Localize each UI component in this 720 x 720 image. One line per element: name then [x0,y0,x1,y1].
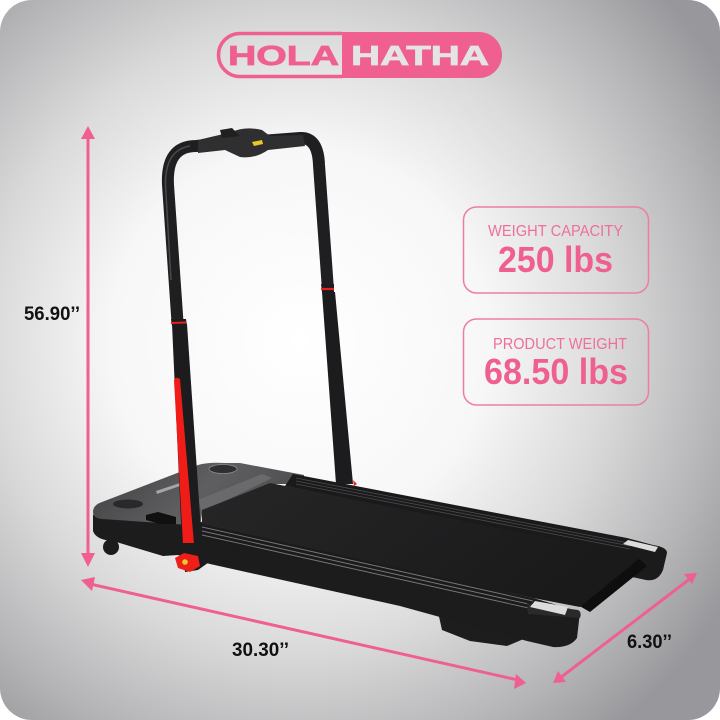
logo: Hola Hatha: HATHA [351,40,489,71]
inner plate bevel [198,474,272,512]
length label: 30.30’’ [232,640,289,661]
tube highlights [165,146,190,280]
small red latch [353,480,357,486]
card: product weight [464,319,648,405]
hub [182,543,212,572]
console plate [93,463,304,526]
logo: Hola Hatha: HOLA [228,40,339,71]
plate label [156,483,180,494]
length arrow [81,577,526,689]
right lower post [322,292,353,484]
end labels [530,601,568,615]
roller [576,558,647,612]
height arrow [81,126,95,567]
card: weight capacity [464,207,648,293]
card: weight capacity: WEIGHT CAPACITY [488,223,623,240]
left lower post [172,324,202,545]
width label: 6.30’’ [627,632,672,653]
near rail [202,524,580,620]
deck side body [93,508,580,647]
belt [202,483,640,607]
red strip [174,378,194,544]
rear far corner cap [625,538,667,580]
height label: 56.90’’ [24,304,80,325]
plate switch [146,512,176,524]
card: product weight: PRODUCT WEIGHT [493,336,627,353]
treadmill [93,128,667,647]
console [198,128,305,157]
near end cap [527,603,581,618]
handle frame [168,138,328,322]
width arrow [553,573,697,683]
right post collar [321,284,334,292]
logo: Hola Hatha [218,32,502,78]
card: product weight: 68.50 lbs [484,351,628,392]
left post collar [171,319,187,326]
right wheel housing [438,612,530,646]
card: weight capacity: 250 lbs [498,239,613,280]
plate pads [209,464,237,474]
red knob [175,553,200,572]
rear wheel [103,539,119,555]
far rail [285,474,636,555]
